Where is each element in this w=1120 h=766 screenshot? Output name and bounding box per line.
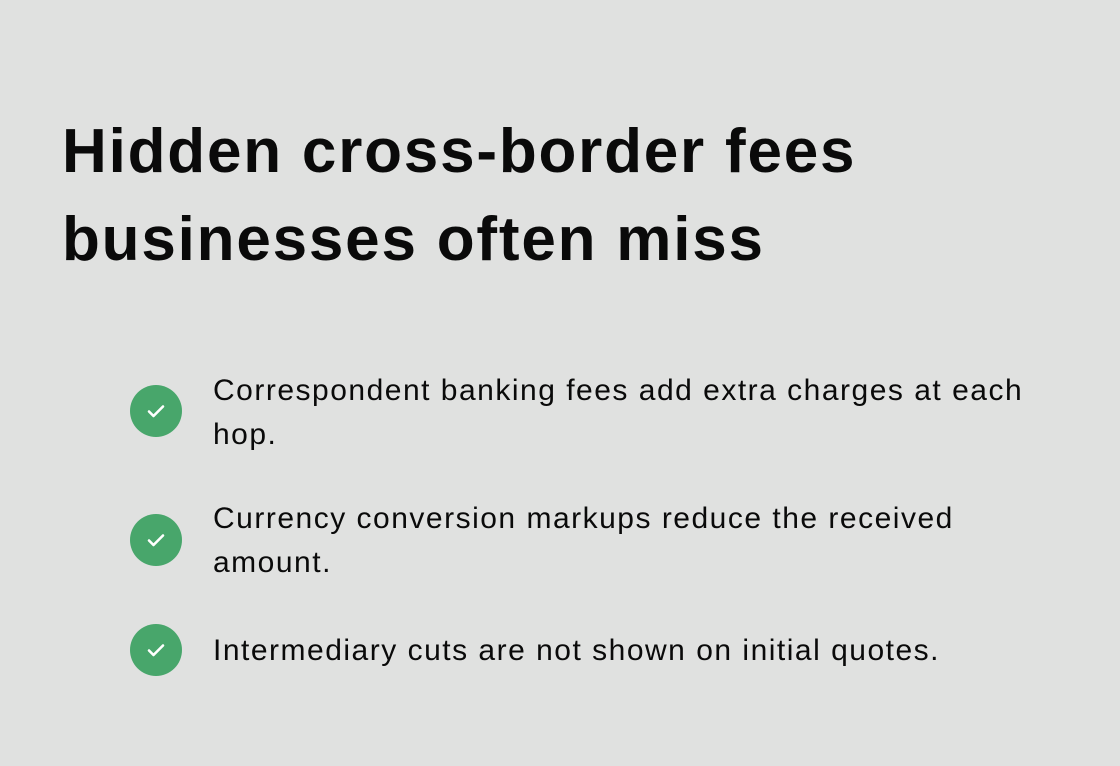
text: currency: Currency conversion markups reduce the received amount. (213, 502, 954, 579)
item: currency conversion (130, 502, 954, 579)
icon: check (130, 624, 182, 676)
item: correspondent banking fees (130, 374, 1023, 451)
icon: check (130, 385, 182, 437)
text: intermediary: Intermediary cuts are not shown on initial quotes. (213, 634, 940, 667)
item: intermediary cuts (130, 624, 940, 676)
title (62, 117, 856, 274)
text: correspondent: Correspondent banking fees add extra charges at each hop. (213, 374, 1023, 451)
icon: check (130, 514, 182, 566)
title: Hidden cross-border fees (62, 117, 856, 186)
title: businesses often miss (62, 205, 765, 274)
